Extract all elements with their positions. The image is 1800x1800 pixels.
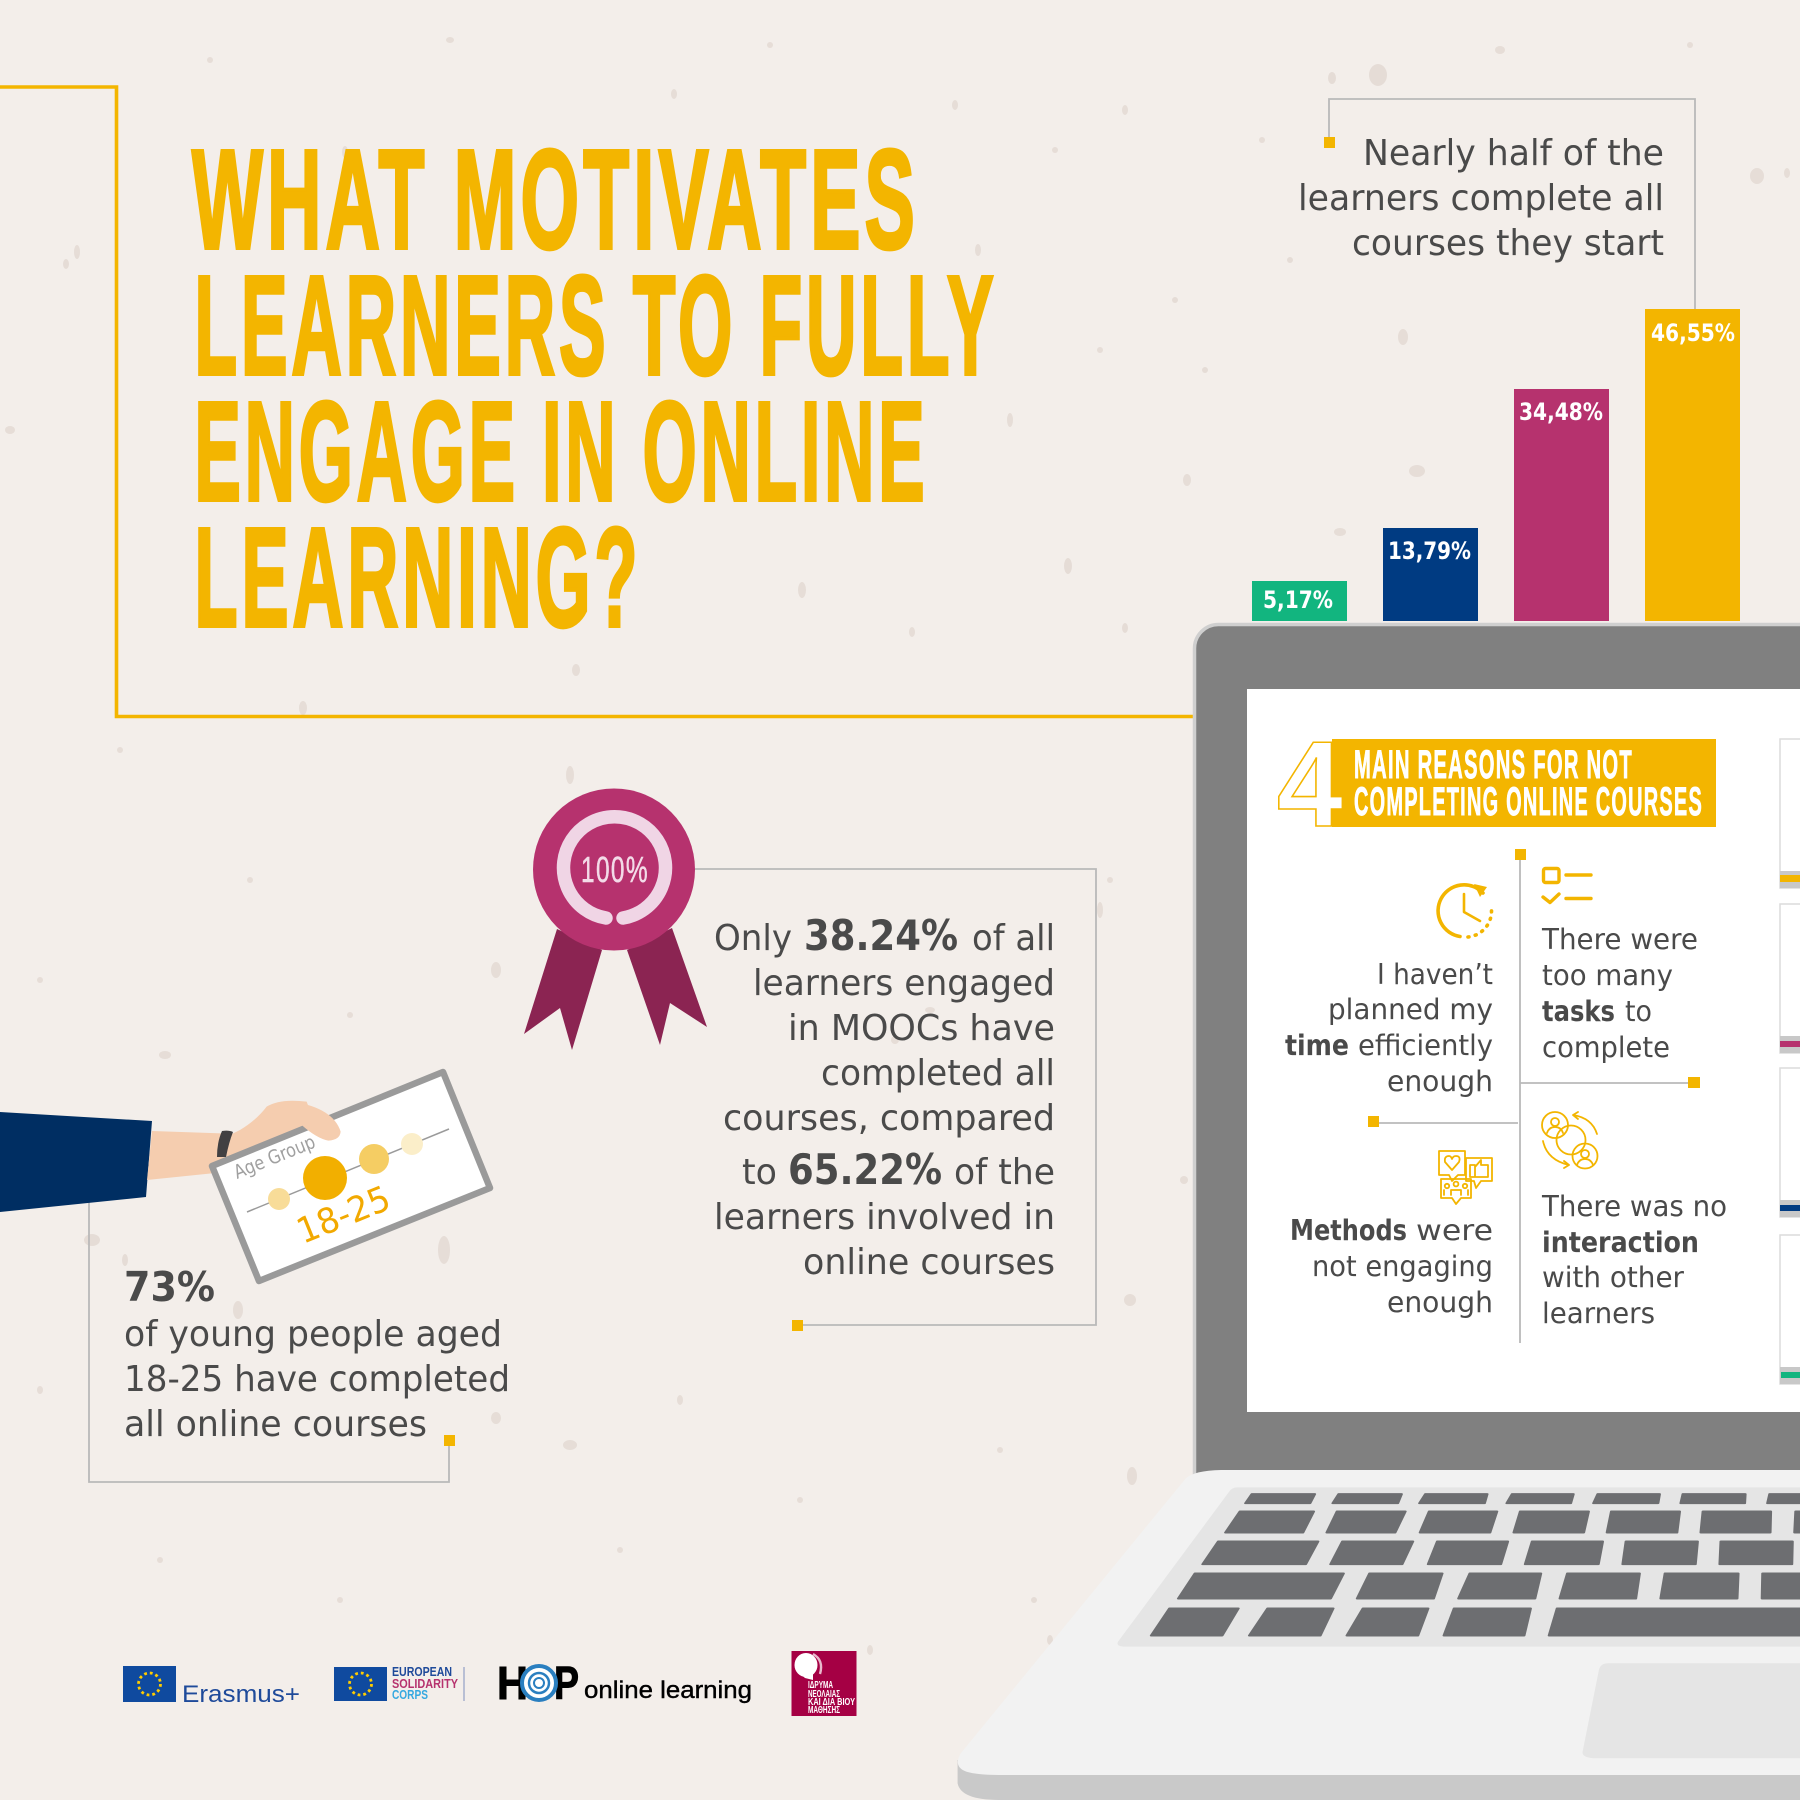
divider lines — [1368, 849, 1700, 1343]
bar: 13,79%: 13,79% — [1388, 537, 1471, 565]
laptop base with keyboard — [958, 1470, 1800, 1800]
callout: nearly half of the learners: learners complete all — [1298, 178, 1664, 219]
sleeve — [0, 1112, 152, 1212]
title: LEARNING? — [194, 498, 642, 656]
callout: 38.24% vs 65.22%: of all — [972, 918, 1055, 959]
logo: INEDIVIM foundation: ΜΑΘΗΣΗΣ — [808, 1705, 840, 1716]
callout: 38.24% vs 65.22% — [695, 869, 1096, 1331]
logo: INEDIVIM foundation: ΚΑΙ ΔΙΑ ΒΙΟΥ — [808, 1697, 855, 1708]
reason: time planning: planned my — [1328, 993, 1493, 1026]
logo: INEDIVIM foundation: ΙΔΡΥΜΑ — [808, 1680, 833, 1691]
bar: 46,55%: 46,55% — [1651, 319, 1735, 347]
icon: people exchange — [1542, 1112, 1598, 1168]
bar: 34,48% — [1514, 389, 1609, 621]
icon: checklist — [1543, 868, 1591, 902]
callout: 38.24% vs 65.22%: courses, compared — [723, 1098, 1055, 1139]
logo: HOP online learning — [497, 1657, 752, 1709]
reason: methods not engaging: Methods — [1290, 1214, 1407, 1247]
callout: 38.24% vs 65.22%: completed all — [821, 1053, 1055, 1094]
logo: Erasmus+: Erasmus+ — [182, 1681, 300, 1708]
logo: European Solidarity Corps: SOLIDARITY — [392, 1677, 459, 1691]
reason: time planning — [1285, 884, 1493, 1098]
reason: methods not engaging: not engaging — [1312, 1250, 1493, 1283]
age group card — [212, 1072, 490, 1281]
logo: Erasmus+ — [123, 1666, 300, 1708]
icon: 100% rosette: 100% — [581, 849, 649, 890]
title: LEARNERS TO FULLY — [194, 246, 998, 404]
reason: time planning: enough — [1387, 1065, 1493, 1098]
banner: 4 main reasons — [1277, 716, 1716, 852]
callout: 38.24% vs 65.22%: in MOOCs have — [788, 1008, 1055, 1049]
icon: clock — [1438, 884, 1492, 937]
reason: no interaction: interaction — [1542, 1226, 1699, 1259]
bar: 5,17%: 5,17% — [1263, 586, 1333, 614]
logo: INEDIVIM foundation: ΝΕΟΛΑΙΑΣ — [808, 1689, 840, 1700]
laptop — [958, 624, 1800, 1800]
callout: 38.24% vs 65.22%: 38.24% — [804, 911, 958, 960]
age group card: 18-25 — [291, 1179, 396, 1252]
title frame line — [0, 87, 1196, 716]
callout: 73% of young people: all online courses — [124, 1404, 427, 1445]
callout: nearly half of the learners: courses they start — [1352, 223, 1664, 264]
callout: 73% of young people: of young people aged — [124, 1314, 502, 1355]
title: WHAT MOTIVATES — [192, 120, 919, 278]
thumb — [267, 1102, 341, 1141]
logos — [123, 1651, 856, 1716]
callout: 38.24% vs 65.22%: of the — [954, 1152, 1055, 1193]
callout: 38.24% vs 65.22%: Only — [714, 918, 792, 959]
illustration: hand holding age group card — [0, 1072, 490, 1281]
bar: 5,17% — [1252, 581, 1347, 621]
laptop lid — [1194, 624, 1800, 1504]
arm — [147, 1131, 240, 1180]
reason: methods not engaging — [1290, 1151, 1493, 1319]
reason: time planning: efficiently — [1358, 1029, 1493, 1062]
reason: time planning: I haven’t — [1377, 958, 1493, 991]
next slide stubs — [1780, 739, 1800, 1384]
bar chart: course completion — [1252, 309, 1740, 621]
reason: no interaction: with other — [1542, 1261, 1684, 1294]
logo: INEDIVIM foundation — [792, 1651, 856, 1716]
reason: too many tasks: to — [1625, 995, 1652, 1028]
logo: HOP online learning: online learning — [584, 1677, 752, 1704]
logo: European Solidarity Corps — [334, 1665, 464, 1702]
callout: 73% of young people: 18-25 have completed — [124, 1359, 510, 1400]
logo: European Solidarity Corps: EUROPEAN — [392, 1665, 452, 1679]
title — [192, 120, 998, 656]
callout: nearly half of the learners: Nearly half of the — [1363, 133, 1664, 174]
bar: 46,55% — [1645, 309, 1740, 621]
reason: methods not engaging: were — [1416, 1214, 1493, 1247]
callout: 73% of young people — [89, 1190, 510, 1482]
icon: social bubbles — [1439, 1151, 1492, 1204]
callout: nearly half of the learners — [1298, 99, 1695, 309]
reason: time planning: time — [1285, 1029, 1349, 1062]
reason: too many tasks — [1541, 868, 1698, 1064]
wristband — [217, 1131, 233, 1157]
reason: too many tasks: too many — [1542, 959, 1673, 992]
bar: 13,79% — [1383, 528, 1478, 621]
title: ENGAGE IN ONLINE — [194, 372, 928, 530]
reason: no interaction: There was no — [1541, 1190, 1727, 1223]
logo: HOP online learning: H — [497, 1657, 528, 1709]
callout: 38.24% vs 65.22%: learners involved in — [714, 1197, 1055, 1238]
logo: European Solidarity Corps: CORPS — [392, 1688, 428, 1702]
laptop screen — [1247, 689, 1800, 1412]
callout: 38.24% vs 65.22%: learners engaged — [753, 963, 1055, 1004]
logo: HOP online learning: P — [554, 1657, 579, 1709]
reason: methods not engaging: enough — [1387, 1286, 1493, 1319]
reason: too many tasks: tasks — [1542, 995, 1615, 1028]
callout: 73% of young people: 73% — [124, 1263, 215, 1311]
back of hand — [227, 1101, 320, 1167]
reason: too many tasks: There were — [1541, 923, 1698, 956]
reason: too many tasks: complete — [1542, 1031, 1670, 1064]
bar: 34,48%: 34,48% — [1519, 398, 1603, 426]
age group card: Age Group — [231, 1131, 319, 1184]
reason: no interaction — [1541, 1112, 1727, 1330]
reason: no interaction: learners — [1542, 1297, 1655, 1330]
callout: 38.24% vs 65.22%: 65.22% — [788, 1145, 942, 1194]
callout: 38.24% vs 65.22%: online courses — [803, 1242, 1055, 1283]
banner: 4 main reasons: 4 — [1277, 716, 1343, 852]
callout: 38.24% vs 65.22%: to — [742, 1152, 777, 1193]
icon: 100% rosette — [524, 788, 707, 1050]
